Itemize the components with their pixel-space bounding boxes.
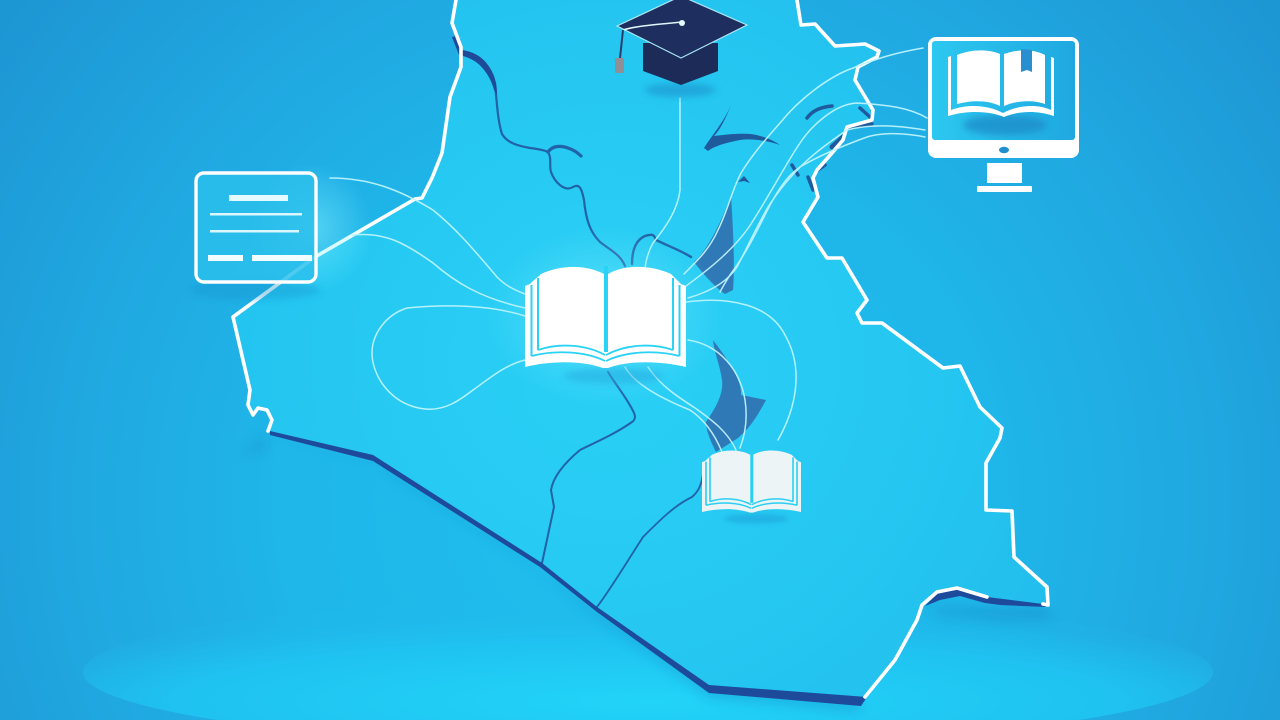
coastal dark edge bbox=[270, 431, 1046, 706]
map shape bbox=[233, 0, 1048, 698]
border-side water marks bbox=[792, 106, 872, 190]
icon: central glow bbox=[485, 225, 725, 405]
connector lines bbox=[330, 48, 927, 452]
icon: document panel bbox=[190, 163, 372, 300]
icon: large open book bbox=[525, 266, 686, 384]
map border bbox=[233, 0, 1048, 697]
book on screen bbox=[948, 50, 1054, 117]
glowing floor ellipse bbox=[83, 598, 1213, 720]
icon: small open book bbox=[702, 450, 801, 524]
rivers bbox=[495, 83, 703, 607]
icon: computer monitor with book bbox=[928, 37, 1079, 192]
marsh patches and lakes bbox=[694, 105, 780, 452]
map shadow bbox=[240, 432, 1056, 712]
river thick upper reach bbox=[452, 36, 497, 95]
icon: graduation cap bbox=[615, 0, 747, 97]
